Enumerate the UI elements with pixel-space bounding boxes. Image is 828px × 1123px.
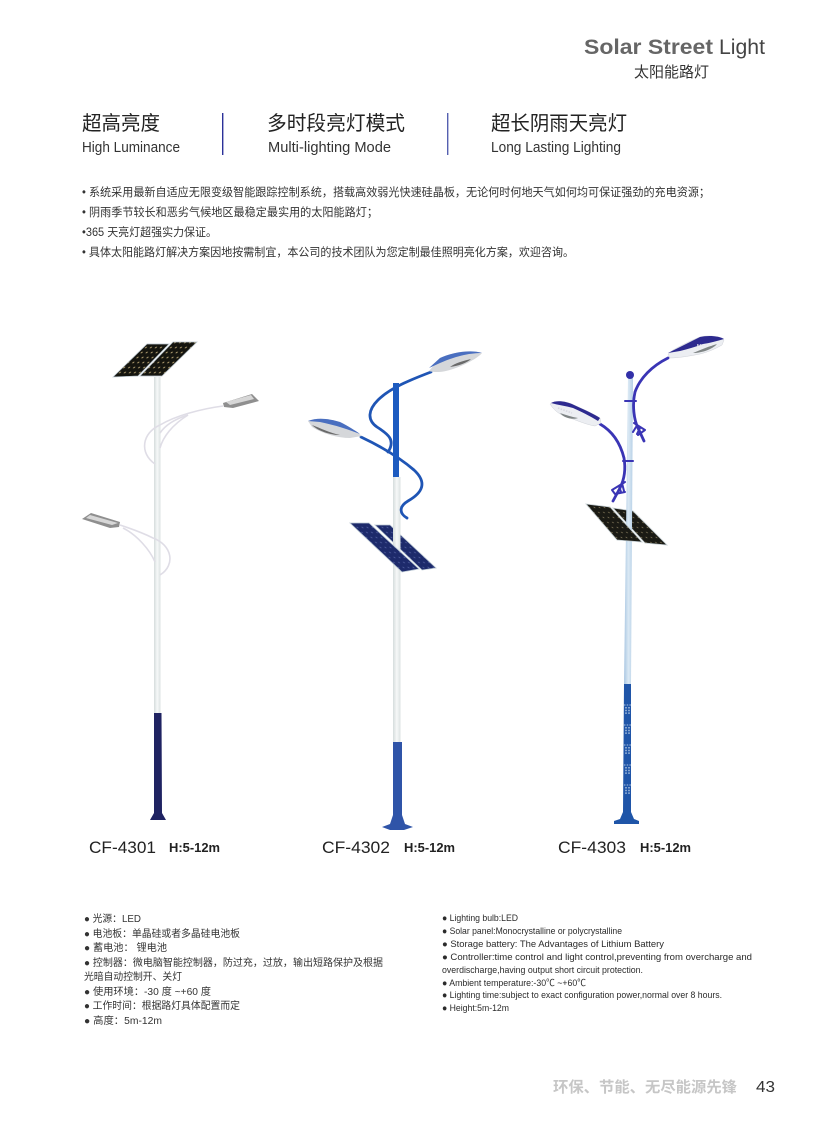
title: Solar Street — [584, 36, 713, 59]
divider two — [447, 113, 448, 155]
description bullets — [82, 185, 710, 259]
lamp heads — [550, 336, 724, 426]
footer slogan: 环保、节能、无尽能源先锋 — [553, 1078, 737, 1096]
description bullets: • 具体太阳能路灯解决方案因地按需制宜，本公司的技术团队为您定制最佳照明亮化方案，欢迎咨询。 — [82, 245, 574, 259]
model labels — [89, 838, 691, 857]
product: street light CF-4303 — [550, 336, 724, 824]
English specifications: ● Storage battery: The Advantages of Lithium Battery — [442, 938, 664, 949]
title: 太阳能路灯 — [634, 64, 709, 81]
solar panels — [113, 342, 197, 377]
product: street light CF-4302 — [308, 351, 482, 830]
Chinese specifications: ● 高度：5m-12m — [84, 1014, 162, 1027]
front solar panel — [350, 523, 419, 572]
pole — [154, 377, 160, 713]
blue base — [382, 742, 413, 830]
English specifications: ● Controller:time control and light control,preventing from overcharge and — [442, 951, 752, 962]
navy pole base — [150, 713, 166, 820]
English specifications: ● Lighting bulb:LED — [442, 912, 518, 923]
feature: multi-lighting mode: Multi-lighting Mode — [268, 140, 391, 156]
page number: 43 — [756, 1079, 775, 1096]
pole — [393, 477, 400, 742]
product: street light CF-4301 — [82, 342, 259, 820]
Chinese specifications: ● 光源：LED — [84, 912, 141, 925]
label CF-4303: CF-4303 — [558, 838, 626, 857]
Chinese specifications — [84, 912, 383, 1027]
feature: high luminance: High Luminance — [82, 140, 180, 156]
title: Light — [719, 36, 765, 59]
label CF-4303 — [558, 838, 691, 857]
arms — [120, 406, 223, 575]
English specifications: ● Solar panel:Monocrystalline or polycrystalline — [442, 925, 622, 936]
feature: multi-lighting mode: 多时段亮灯模式 — [267, 112, 405, 135]
rear solar panel — [375, 525, 436, 570]
title — [584, 36, 765, 81]
description bullets: • 系统采用最新自适应无限变级智能跟踪控制系统，搭载高效弱光快速硅晶板，无论何时何地天气如何均可保证强劲的充电资源； — [82, 185, 710, 199]
label CF-4301: H:5-12m — [169, 841, 220, 855]
lamp heads — [308, 351, 482, 438]
finial — [626, 371, 634, 379]
front solar panel — [586, 504, 642, 542]
patterned blue base — [614, 684, 639, 824]
label CF-4303: H:5-12m — [640, 841, 691, 855]
English specifications: ● Lighting time:subject to exact configuration power,normal over 8 hours. — [442, 989, 722, 1000]
arms and brackets — [600, 358, 668, 501]
divider one — [222, 113, 223, 155]
lamp heads — [82, 394, 259, 528]
description bullets: • 阴雨季节较长和恶劣气候地区最稳定最实用的太阳能路灯； — [82, 205, 378, 219]
English specifications — [442, 912, 752, 1013]
feature: multi-lighting mode — [267, 112, 405, 156]
English specifications: ● Ambient temperature:-30℃ ~+60℃ — [442, 977, 586, 988]
feature headings — [82, 112, 627, 156]
Chinese specifications: ● 电池板：单晶硅或者多晶硅电池板 — [84, 927, 240, 940]
Chinese specifications: 光暗自动控制开、关灯 — [84, 970, 182, 983]
English specifications: ● Height:5m-12m — [442, 1002, 509, 1013]
feature: high luminance: 超高亮度 — [82, 112, 160, 135]
pole — [624, 378, 633, 684]
label CF-4302: H:5-12m — [404, 841, 455, 855]
Chinese specifications: ● 使用环境：-30 度 ~+60 度 — [84, 985, 211, 998]
label CF-4301 — [89, 838, 220, 857]
Chinese specifications: ● 工作时间：根据路灯具体配置而定 — [84, 999, 240, 1012]
English specifications: overdischarge,having output short circuit protection. — [442, 964, 643, 975]
feature: long lasting lighting: Long Lasting Lighting — [491, 140, 621, 156]
label CF-4302: CF-4302 — [322, 838, 390, 857]
label CF-4301: CF-4301 — [89, 838, 156, 857]
Chinese specifications: ● 控制器：微电脑智能控制器，防过充，过放，输出短路保护及根据 — [84, 956, 383, 969]
feature: long lasting lighting: 超长阴雨天亮灯 — [491, 112, 627, 135]
Chinese specifications: ● 蓄电池： 锂电池 — [84, 941, 167, 954]
label CF-4302 — [322, 838, 455, 857]
feature: long lasting lighting — [491, 112, 627, 156]
description bullets: •365 天亮灯超强实力保证。 — [82, 225, 217, 239]
blue sleeve and arms — [361, 372, 431, 518]
rear solar panel — [613, 508, 667, 545]
feature: high luminance — [82, 112, 180, 156]
